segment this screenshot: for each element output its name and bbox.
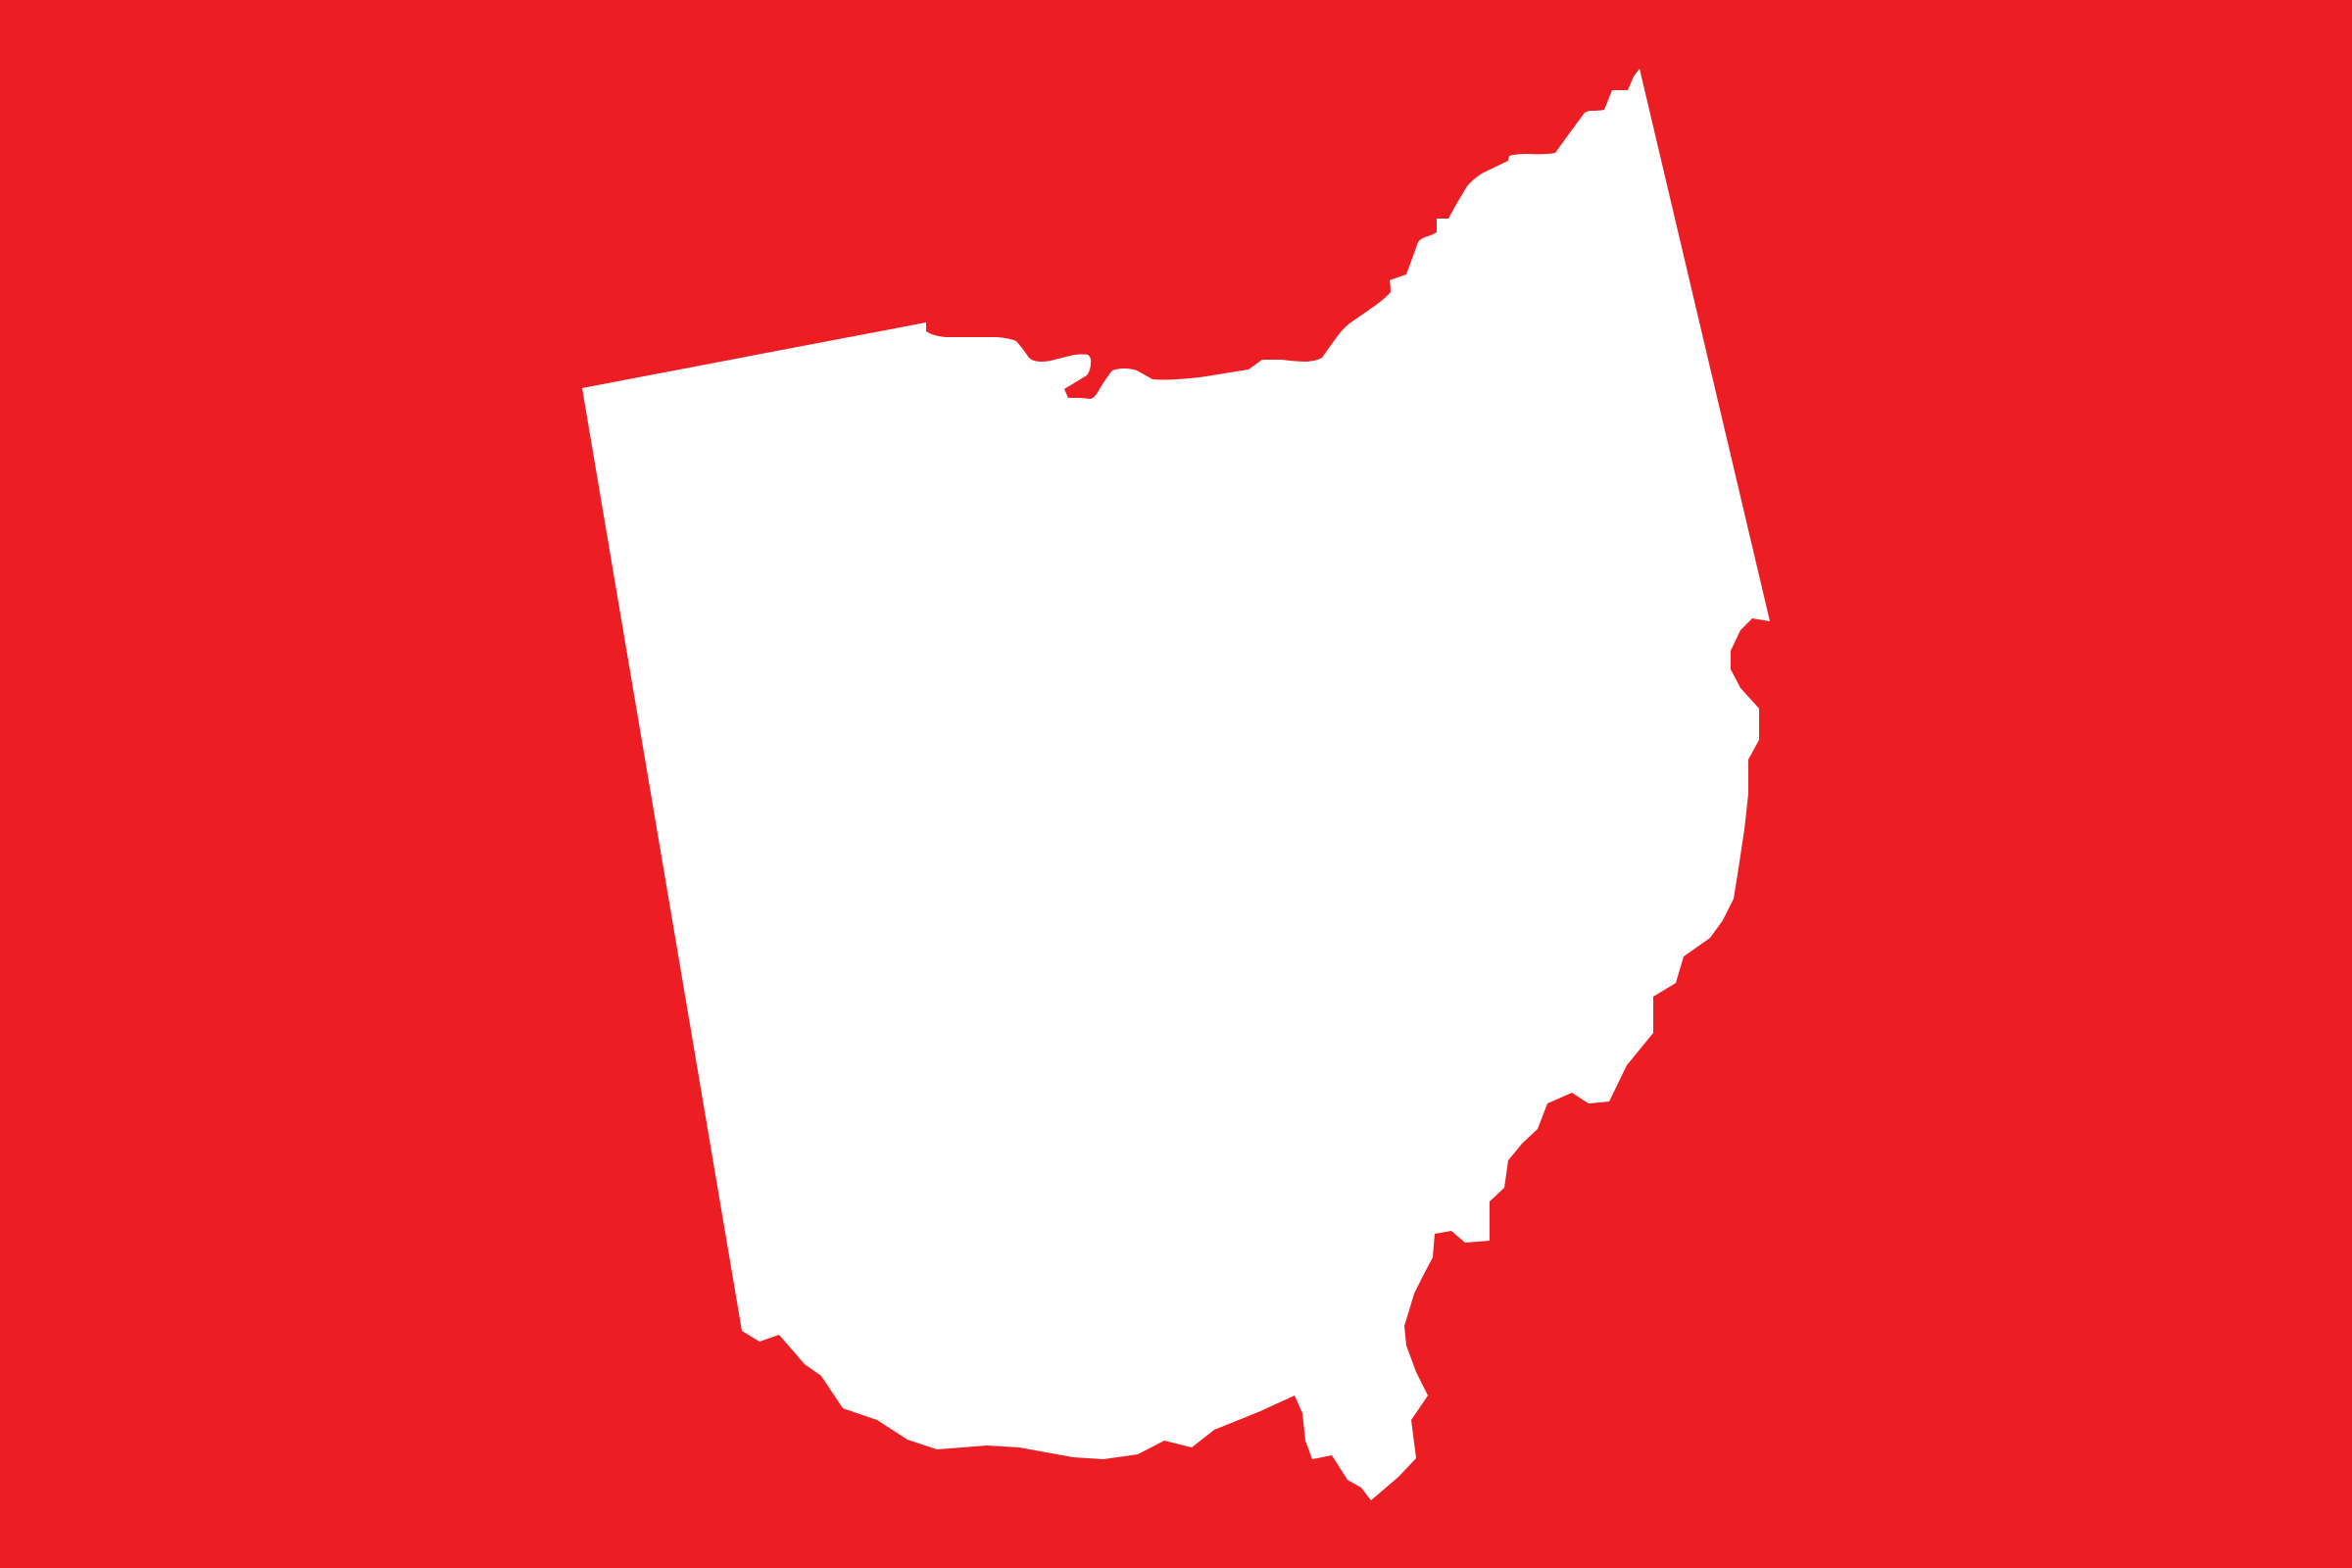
map: Ohio state silhouette (582, 69, 1770, 1500)
